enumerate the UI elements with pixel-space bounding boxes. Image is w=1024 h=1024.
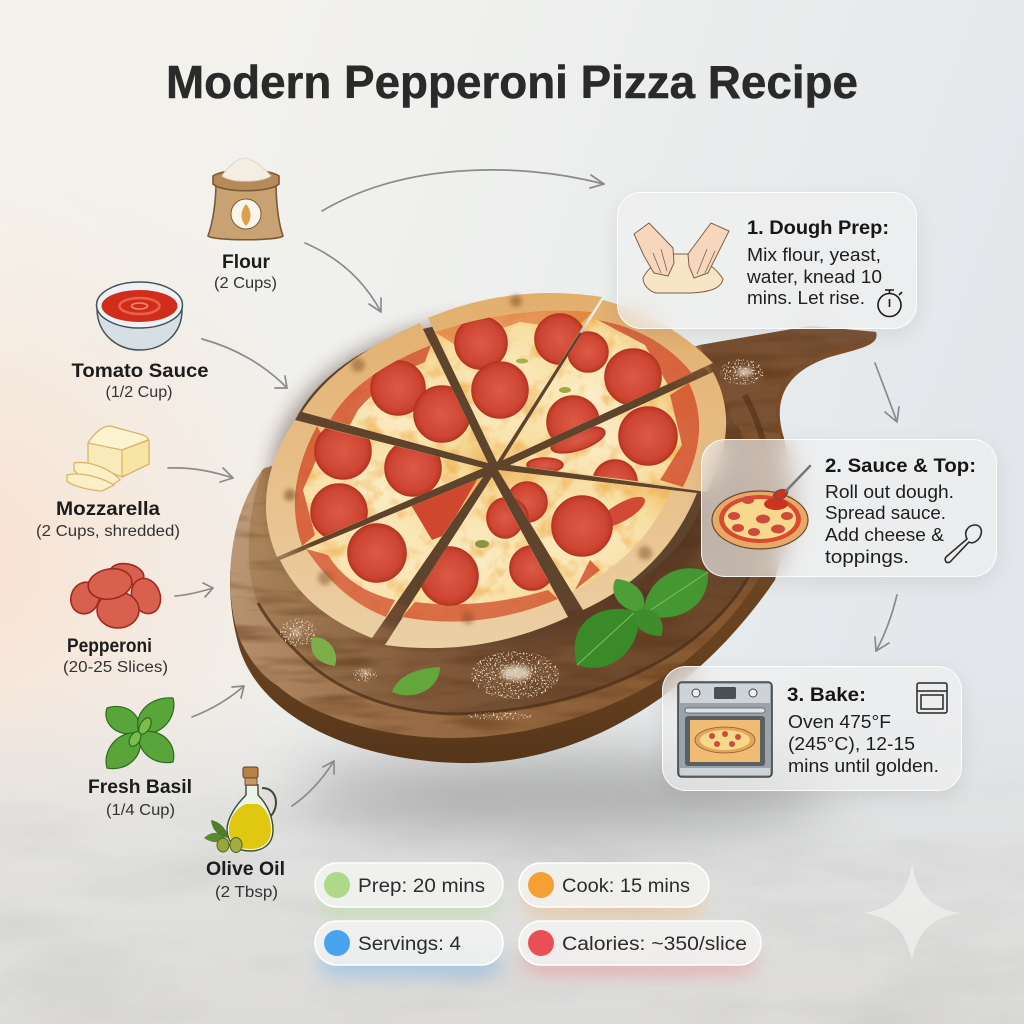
ingredient: mozzarella: (2 Cups, shredded)	[36, 523, 180, 540]
icon: olive oil bottle	[204, 767, 276, 852]
ingredient: flour: Flour	[222, 251, 270, 273]
step 2 text: Spread sauce.	[825, 502, 946, 523]
pill: cook time: Cook: 15 mins	[562, 876, 690, 897]
stats pills	[315, 863, 761, 976]
step 1 text	[746, 217, 889, 308]
pill: servings	[315, 921, 503, 965]
ingredient: tomato sauce	[72, 282, 209, 401]
ingredient: pepperoni: (20-25 Slices)	[63, 659, 168, 676]
icon: small oven	[917, 683, 947, 713]
pill: servings: Servings: 4	[358, 934, 461, 955]
slice: bottom left	[280, 477, 483, 638]
step 2 text: 2. Sauce & Top:	[825, 455, 976, 477]
icon: cheese block	[67, 426, 149, 491]
ingredient: olive oil: (2 Tbsp)	[215, 884, 278, 901]
slice: bottom	[385, 477, 568, 648]
pill: cook time	[519, 863, 709, 907]
slice: top	[428, 293, 602, 462]
icon: oven with pizza	[678, 682, 772, 777]
pill: prep time: Prep: 20 mins	[358, 876, 485, 897]
card: bake	[662, 666, 962, 791]
ingredient: olive oil: Olive Oil	[206, 858, 285, 880]
arrow: mozzarella to pizza	[168, 468, 233, 482]
step 2 text: Add cheese &	[825, 524, 945, 545]
ingredient: fresh basil: Fresh Basil	[88, 776, 192, 798]
ingredient: olive oil	[204, 767, 285, 901]
arrow: ingredients to dough step	[322, 170, 604, 211]
ingredient: fresh basil	[88, 698, 192, 819]
slice: top right	[503, 300, 713, 460]
step 1 text: Mix flour, yeast,	[747, 244, 881, 265]
step 3 text: 3. Bake:	[787, 684, 866, 706]
ingredient: tomato sauce: (1/2 Cup)	[106, 384, 172, 401]
pill: calories: Calories: ~350/slice	[562, 934, 747, 955]
icon: basil leaves	[106, 698, 174, 769]
slice: left	[266, 420, 483, 557]
step 3 text: Oven 475°F	[788, 711, 891, 732]
icon: pepperoni slices	[66, 561, 165, 628]
card: sauce and top	[701, 439, 997, 577]
icon: sauce bowl	[96, 282, 182, 350]
card: dough prep	[617, 192, 917, 329]
ingredient: flour: (2 Cups)	[214, 275, 277, 292]
step 1 text: mins. Let rise.	[747, 287, 865, 308]
title: Modern Pepperoni Pizza Recipe	[166, 56, 858, 108]
slice: top left	[302, 323, 488, 463]
arrow: basil to pizza	[192, 686, 244, 717]
icon: pizza with sauce spoon	[712, 466, 810, 549]
slice: lower right	[488, 470, 697, 610]
ingredient: mozzarella	[36, 426, 180, 540]
step 3 text: mins until golden.	[788, 755, 939, 776]
arrow: olive oil to pizza	[292, 761, 334, 806]
icon: hands kneading dough	[634, 223, 729, 293]
sparkle	[864, 865, 960, 960]
arrow: pepperoni to pizza	[175, 583, 213, 597]
ingredient: pepperoni: Pepperoni	[67, 635, 152, 657]
arrow: tomato sauce to pizza	[202, 339, 287, 388]
slice: right	[510, 372, 726, 504]
wooden pizza board	[230, 326, 877, 763]
step 2 text: Roll out dough.	[825, 481, 954, 502]
step 1 text: water, knead 10	[746, 266, 882, 287]
step 3 text: (245°C), 12-15	[788, 733, 915, 754]
ingredient: tomato sauce: Tomato Sauce	[72, 360, 209, 382]
arrow: dough to sauce step	[875, 363, 899, 422]
step 3 text	[787, 684, 939, 776]
step 2 text: toppings.	[825, 546, 909, 567]
arrow: flour to pizza	[305, 243, 381, 312]
icon: stopwatch	[878, 290, 902, 316]
pill: calories	[519, 921, 761, 965]
icon: spoon	[945, 525, 981, 563]
pill: prep time	[315, 863, 503, 907]
arrow: sauce to bake step	[875, 595, 897, 651]
basil garnish	[311, 568, 708, 695]
icon: flour sack	[208, 158, 283, 240]
step 2 text	[825, 455, 976, 567]
ingredient: mozzarella: Mozzarella	[56, 498, 160, 520]
pizza	[266, 293, 726, 648]
ingredient: fresh basil: (1/4 Cup)	[106, 802, 175, 819]
board shadow	[290, 759, 830, 831]
flour dust	[280, 359, 764, 720]
ingredient: flour	[208, 158, 283, 292]
step 1 text: 1. Dough Prep:	[747, 217, 889, 239]
ingredient: pepperoni	[63, 561, 168, 676]
